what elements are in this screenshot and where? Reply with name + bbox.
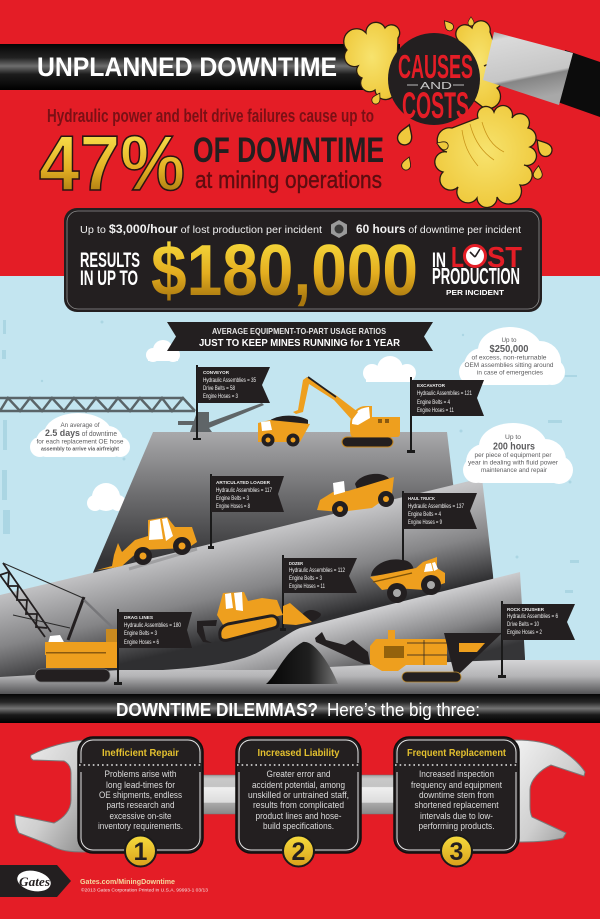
results in up to: [80, 249, 140, 290]
downtime hours line: 60 hours of downtime per incident: [356, 222, 521, 236]
footer logo tag: [0, 865, 71, 897]
card body: intervals due to low-: [420, 811, 493, 822]
flag: rock crusher: Drive Belts = 10: [507, 621, 539, 628]
flag: dozer: Engine Hoses = 11: [289, 583, 325, 590]
flag: drag lines: Engine Hoses = 6: [124, 639, 159, 646]
section heading: DOWNTIME DILEMMAS?: [116, 700, 318, 720]
card body: downtime stem from: [419, 790, 494, 801]
icon: hex nut: [331, 220, 347, 238]
card body: OE shipments, endless: [99, 790, 182, 801]
cost per hour line: Up to $3,000/hour of lost production per incident: [80, 222, 322, 236]
cloud callout: 200 hours: 200 hours: [493, 442, 535, 452]
section heading: [116, 699, 480, 720]
cloud callout: 2.5 days: assembly to arrive via airfreight: [41, 446, 119, 452]
machine: small dump truck: [258, 416, 310, 446]
card title: Frequent Replacement: [407, 748, 507, 759]
card body: [411, 769, 502, 832]
card body: [248, 769, 349, 832]
flag: drag lines: [114, 609, 192, 685]
oil blob upper left: [344, 22, 400, 100]
card body: accident potential, among: [252, 780, 345, 791]
red background top: [0, 0, 600, 277]
flag: rock crusher: Hydraulic Assemblies = 6: [507, 613, 558, 620]
cloud callout: 250000: [459, 327, 565, 385]
flag: articulated loader: [208, 474, 284, 549]
number badge 2: 2: [292, 838, 305, 866]
card body: [98, 769, 183, 832]
sky speckles: [2, 320, 579, 593]
of downtime: OF DOWNTIME: [193, 131, 384, 170]
flag: dozer: Engine Belts = 3: [289, 575, 322, 582]
footer copyright: ©2013 Gates Corporation Printed in U.S.A. 99993-1 03/13: [81, 886, 208, 894]
flag: drag lines: DRAG LINES: [124, 615, 153, 620]
footer logo tag: Gates: [19, 874, 50, 889]
flag: rock crusher: Engine Hoses = 2: [507, 629, 542, 636]
cloud callout: 200 hours: year in dealing with fluid power: [468, 460, 559, 466]
flag: dozer: DOZER: [289, 561, 304, 566]
cloud callout: 2.5 days: 2.5 days of downtime: [45, 428, 117, 439]
card title: Inefficient Repair: [102, 748, 179, 759]
flag: excavator: [407, 377, 484, 453]
mountain: lower slope: [120, 572, 525, 690]
footer url: Gates.com/MiningDowntime: [80, 877, 175, 886]
180000 figure: $180,000: [151, 231, 418, 311]
ground floor: [0, 660, 600, 696]
machine: dozer: [197, 592, 321, 643]
flag: haul truck: HAUL TRUCK: [408, 496, 436, 501]
conveyor base: [178, 403, 264, 432]
wrench: [15, 740, 585, 852]
card title: Increased Liability: [258, 748, 340, 759]
red background bottom: [0, 722, 600, 919]
flag: articulated loader: ARTICULATED LOADER: [216, 480, 271, 485]
at mining operations: at mining operations: [195, 167, 382, 194]
card body: shortened replacement: [414, 800, 499, 811]
in lost production: ST: [487, 242, 522, 274]
cloud callout: 2.5 days: for each replacement OE hose: [36, 438, 124, 446]
cloud: small under banner: [146, 340, 180, 362]
number badge 1: 1: [134, 838, 148, 866]
oil jet streaks: [462, 122, 504, 166]
flag: dozer: [280, 555, 357, 631]
oil blob lower: [435, 106, 536, 208]
cost panel: [64, 208, 542, 312]
flag: excavator: Hydraulic Assemblies = 121: [417, 390, 472, 397]
cloud callout: 250000: OEM assemblies sitting around: [464, 362, 554, 369]
flag: conveyor: Engine Hoses = 3: [203, 393, 238, 400]
usage ratio banner: JUST TO KEEP MINES RUNNING for 1 YEAR: [199, 337, 400, 349]
results in up to: RESULTS: [80, 249, 140, 272]
in lost production: PRODUCTION: [432, 263, 520, 289]
mountain: upper plateau: [92, 432, 455, 575]
card body: Problems arise with: [104, 769, 176, 780]
cloud callout: 250000: $250,000: [490, 344, 529, 355]
conveyor boom truss: [0, 398, 195, 411]
machine: excavator: [293, 377, 400, 447]
machine: loader: [97, 517, 197, 570]
causes and costs badge: AND: [420, 81, 452, 92]
cloud callout: 2.5 days: [30, 413, 130, 457]
flag: haul truck: Hydraulic Assemblies = 137: [408, 503, 464, 510]
card body: product lines and hose-: [256, 811, 342, 822]
cloud: small near excavator: [363, 356, 416, 382]
card: increased liability: [236, 737, 361, 866]
flag: articulated loader: Engine Hoses = 8: [216, 503, 250, 510]
section heading: Here’s the big three:: [327, 699, 480, 720]
hose ferrule: [483, 32, 573, 105]
causes and costs badge: COSTS: [402, 85, 469, 126]
flag: articulated loader: Engine Belts = 3: [216, 495, 249, 502]
sky background: [0, 276, 600, 696]
card body: excessive on-site: [110, 811, 172, 822]
usage ratio banner: [167, 322, 433, 351]
cloud callout: 200 hours: per piece of equipment per: [474, 452, 552, 459]
cloud callout: 200 hours: maintenance and repair: [481, 467, 548, 474]
machine: drag line: [0, 563, 118, 682]
flag: conveyor: CONVEYOR: [203, 370, 230, 375]
in lost production: L: [451, 242, 464, 274]
flag: rock crusher: [498, 601, 575, 678]
flag: haul truck: [402, 491, 477, 563]
cloud callout: 250000: Up to: [502, 337, 517, 344]
cloud callout: 250000: in case of emergencies: [477, 370, 544, 376]
cloud callout: 2.5 days: An average of: [60, 422, 100, 429]
flag: conveyor: Drive Belts = 58: [203, 385, 235, 392]
in lost production: [432, 242, 522, 297]
card body: Greater error and: [266, 769, 330, 780]
number badge 3: 3: [450, 838, 463, 866]
card: frequent replacement: [394, 737, 519, 866]
flag: conveyor: Hydraulic Assemblies = 35: [203, 377, 256, 384]
coal pile: [266, 642, 338, 684]
subhead: Hydraulic power and belt drive failures cause up to: [47, 106, 374, 126]
in lost production: IN: [432, 249, 446, 272]
usage ratio banner: AVERAGE EQUIPMENT-TO-PART USAGE RATIOS: [212, 326, 386, 336]
cloud callout: 200 hours: Up to: [505, 434, 521, 441]
in lost production: PER INCIDENT: [446, 288, 504, 297]
flag: haul truck: Engine Belts = 4: [408, 511, 441, 518]
hose end right: [552, 50, 600, 117]
flag: articulated loader: Hydraulic Assemblies = 117: [216, 487, 272, 494]
cloud callout: 200 hours: [463, 423, 573, 484]
oil droplets: [370, 17, 555, 180]
card body: parts research and: [106, 800, 174, 811]
machine: haul truck: [370, 557, 445, 603]
card: inefficient repair: [78, 737, 203, 866]
flag: haul truck: Engine Hoses = 9: [408, 519, 442, 526]
cloud: small lower left: [87, 483, 126, 511]
title: UNPLANNED DOWNTIME: [37, 52, 337, 82]
results in up to: IN UP TO: [80, 267, 138, 290]
flag: excavator: EXCAVATOR: [417, 383, 446, 388]
causes and costs badge: [388, 33, 480, 126]
card body: inventory requirements.: [98, 821, 183, 832]
card body: performing products.: [418, 821, 494, 832]
card body: frequency and equipment: [411, 780, 502, 791]
47 percent stat: 47%: [39, 119, 185, 207]
mountain: middle slope: [0, 478, 500, 694]
cloud callout: 250000: of excess, non-returnable: [472, 354, 547, 362]
icon: clock: [464, 246, 486, 266]
machine: rock crusher: [315, 630, 502, 682]
flag: dozer: Hydraulic Assemblies = 112: [289, 567, 345, 574]
machine: articulated truck: [317, 474, 394, 517]
hose top: [0, 44, 400, 90]
flag: excavator: Engine Belts = 4: [417, 399, 450, 406]
card body: results from complicated: [253, 800, 344, 811]
card body: build specifications.: [263, 821, 334, 832]
card body: long lead-times for: [106, 780, 175, 791]
flag: rock crusher: ROCK CRUSHER: [507, 607, 545, 612]
flag: drag lines: Hydraulic Assemblies = 180: [124, 622, 181, 629]
card body: Increased inspection: [419, 769, 494, 780]
flag: conveyor: [193, 365, 270, 440]
oil blob upper right: [456, 21, 503, 109]
flag: excavator: Engine Hoses = 11: [417, 407, 454, 414]
card body: unskilled or untrained staff,: [248, 790, 349, 801]
causes and costs badge: CAUSES: [398, 48, 473, 85]
hose bottom: [0, 694, 600, 723]
flag: drag lines: Engine Belts = 3: [124, 630, 157, 637]
